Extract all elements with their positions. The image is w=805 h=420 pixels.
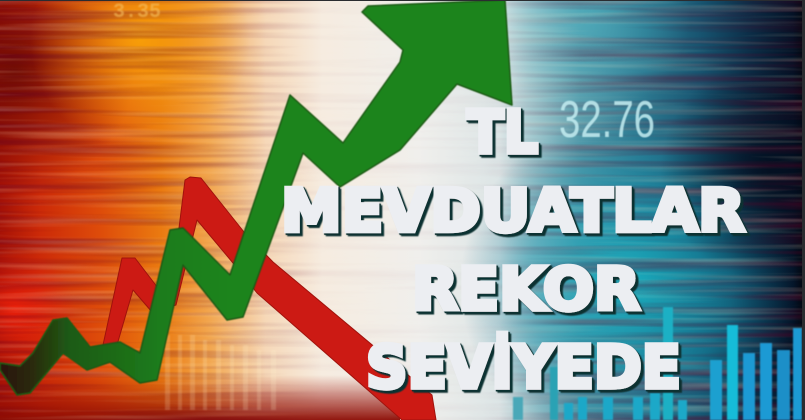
headline line: TL: TL bbox=[467, 98, 538, 166]
red falling line bbox=[103, 177, 436, 420]
ticker number 32.76: 32.76 bbox=[559, 91, 655, 149]
bar chart: blue bars, bottom right bbox=[513, 307, 802, 420]
headline: TL Mevduatlar Rekor Seviyede bbox=[281, 98, 745, 402]
headline line: SEVİYEDE: SEVİYEDE bbox=[366, 332, 681, 402]
green rising arrow with thin dark edge bbox=[0, 0, 512, 395]
ghost numbers: faded ticker on the orange side: 3.35 bbox=[113, 1, 161, 24]
headline line: REKOR: REKOR bbox=[412, 254, 640, 324]
headline line: MEVDUATLAR: MEVDUATLAR bbox=[281, 176, 745, 245]
vertical pale stripes, bottom centre bbox=[165, 335, 276, 410]
